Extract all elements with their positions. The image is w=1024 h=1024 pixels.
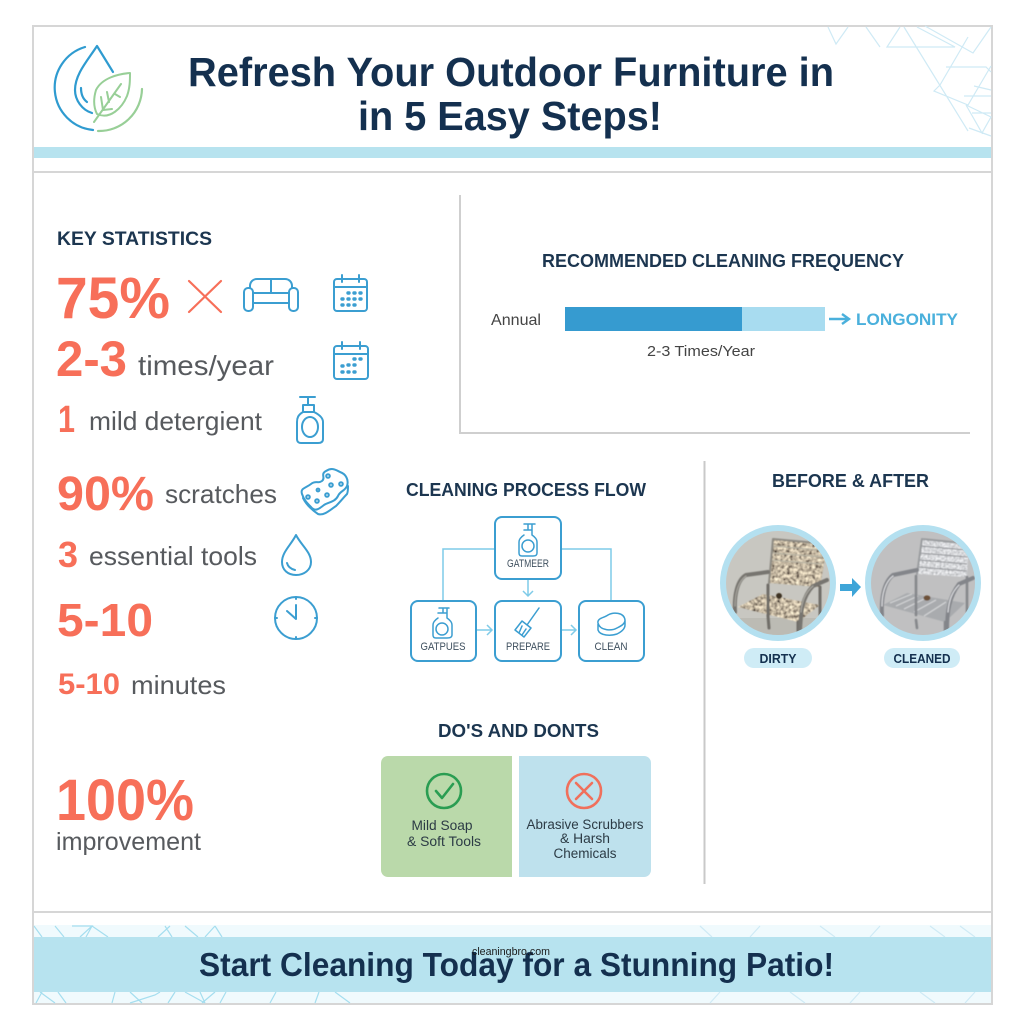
banner band	[34, 937, 991, 992]
icon: calendar	[334, 275, 367, 311]
text: abrasive scrubbers: Chemicals	[554, 846, 617, 861]
label: dirty	[744, 648, 812, 668]
text: abrasive scrubbers: & Harsh	[560, 831, 610, 846]
icon: clock	[275, 597, 317, 639]
call to action: Start Cleaning Today for a Stunning Patio!	[199, 946, 834, 983]
step: clean	[579, 601, 644, 661]
icon: calendar small	[334, 342, 368, 379]
heading: process flow: CLEANING PROCESS FLOW	[406, 480, 646, 500]
label: cleaned: CLEANED	[894, 652, 950, 666]
label: longonity: LONGONITY	[856, 310, 959, 329]
panel: recommended cleaning frequency	[460, 195, 970, 433]
stat: 1 mild detergient: 1	[58, 399, 75, 441]
stat: 75%: 75%	[56, 266, 170, 331]
text: abrasive scrubbers: Abrasive Scrubbers	[526, 817, 644, 832]
stat: 5-10 minutes: 5-10	[58, 668, 120, 701]
text: mild soap	[407, 817, 481, 849]
heading: key statistics: KEY STATISTICS	[57, 229, 212, 250]
text: mild soap: & Soft Tools	[407, 833, 481, 849]
stat: 100% improvement: improvement	[56, 828, 201, 856]
panel: before and after	[720, 471, 985, 668]
footer banner	[34, 925, 991, 1003]
heading: before and after: BEFORE & AFTER	[772, 471, 929, 491]
stat: 2-3 times/year	[56, 331, 274, 387]
label: annual: Annual	[491, 312, 541, 329]
step: gatpues: GATPUES	[420, 641, 466, 653]
title: Refresh Your Outdoor Furniture in	[188, 49, 834, 95]
logo: water drop and leaf	[55, 46, 142, 131]
header panel	[34, 26, 991, 158]
stat: 5-10 minutes	[58, 668, 226, 701]
icon: water drop	[282, 535, 311, 575]
stat: 3 essential tools	[58, 534, 257, 575]
footer triangle pattern	[34, 926, 975, 1003]
step: gatpues	[411, 601, 476, 661]
photo: cleaned chair	[865, 525, 985, 641]
icon: sofa	[244, 279, 298, 311]
card: do	[381, 756, 512, 877]
stat: 3 essential tools: 3	[58, 534, 78, 575]
title: in 5 Easy Steps!	[358, 93, 662, 139]
step: prepare	[495, 601, 561, 661]
card: dont	[519, 756, 651, 877]
stat: 5-10 minutes: minutes	[131, 670, 226, 700]
panel: cleaning process flow	[406, 480, 646, 661]
stat: 1 mild detergient: mild detergient	[89, 406, 263, 436]
icon: check	[427, 774, 461, 808]
connectors	[443, 549, 611, 635]
stat: 5-10: 5-10	[57, 594, 153, 646]
label: cleaned	[884, 648, 960, 668]
text: abrasive scrubbers	[526, 817, 644, 861]
divider	[704, 461, 706, 884]
stat: 1 mild detergient	[58, 399, 263, 441]
step: gatmeer: GATMEER	[507, 558, 549, 570]
stat: 3 essential tools: essential tools	[89, 541, 257, 571]
icon: detergent bottle	[297, 397, 323, 443]
watermark: cleaningbro.com	[472, 946, 550, 958]
panel: key statistics	[56, 229, 368, 856]
photo: dirty chair	[720, 525, 840, 642]
label: dirty: DIRTY	[760, 652, 797, 666]
heading: frequency: RECOMMENDED CLEANING FREQUENCY	[542, 251, 904, 271]
icon: cross	[189, 281, 221, 312]
text: mild soap: Mild Soap	[412, 817, 473, 833]
icon: sponge	[302, 469, 348, 514]
stat: 90% scratches: 90%	[57, 468, 154, 521]
panel: do's and don'ts	[381, 721, 651, 877]
title	[188, 49, 834, 139]
step: gatmeer	[495, 517, 561, 579]
icon: cross circle	[567, 774, 601, 808]
heading: do's and donts: DO'S AND DONTS	[438, 721, 599, 741]
stat: 90% scratches	[57, 468, 277, 521]
step: clean: CLEAN	[594, 641, 628, 653]
arrow	[829, 314, 849, 324]
stat: 90% scratches: scratches	[165, 479, 277, 509]
icon: arrow right	[840, 578, 861, 597]
label: 2-3 times/year: 2-3 Times/Year	[647, 343, 755, 360]
stat: 100% improvement: 100%	[56, 768, 194, 833]
stat: 2-3 times/year: times/year	[138, 350, 274, 381]
header band	[34, 147, 991, 158]
step: prepare: PREPARE	[506, 641, 550, 653]
frequency bar	[565, 307, 825, 331]
stat: 2-3 times/year: 2-3	[56, 331, 127, 387]
header triangle pattern	[828, 26, 991, 136]
